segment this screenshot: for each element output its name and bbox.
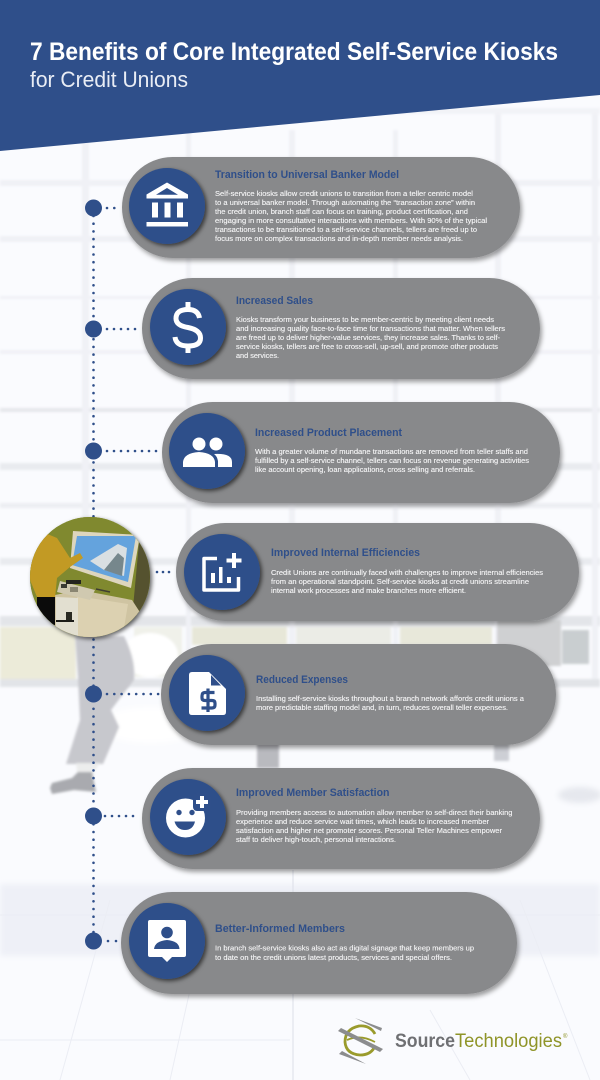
panel: Reduced Expenses	[161, 644, 556, 745]
logo: Source Technologies: Technologies	[455, 1031, 562, 1052]
body text: In branch self-service kiosks also act as digital signage that keep members up	[215, 944, 474, 952]
body text: fulfilled by a self-service channel, tellers can focus on revenue generating activities	[255, 456, 529, 465]
body text: satisfaction and higher net promoter scores. Personal Teller Machines empower	[236, 826, 502, 835]
body text: Kiosks transform your business to be member-centric by meeting client needs	[236, 315, 494, 324]
body text: Providing members access to automation allow member to self-direct their banking	[236, 808, 512, 817]
body text: With a greater volume of mundane transactions are removed from teller staffs and	[255, 447, 528, 456]
body text: from an operational standpoint. Self-service kiosks at credit unions streamline	[271, 577, 529, 586]
icon: document with dollar	[169, 655, 245, 731]
panel: Improved Internal Efficiencies	[176, 523, 579, 621]
header banner	[0, 0, 600, 151]
logo: Source Technologies: Source	[395, 1031, 455, 1052]
body text: staff to deliver high-touch, personal interactions.	[236, 835, 396, 844]
subtitle: for Credit Unions	[30, 67, 188, 92]
timeline	[85, 200, 175, 950]
icon: dollar sign	[150, 289, 226, 365]
body text: transactions to be transitioned to a self-service channels, tellers are freed up to	[215, 225, 477, 234]
body text: the credit union, branch staff can focus on training, product certification, and	[215, 207, 468, 216]
body text: engaging in more consultative interactions with members. With 90% of the typical	[215, 216, 487, 225]
logo: Source Technologies	[338, 1018, 568, 1064]
body text: Self-service kiosks allow credit unions to transition from a teller centric model	[215, 189, 473, 198]
body text	[236, 808, 512, 844]
body text	[236, 315, 505, 360]
body text: like account opening, loan applications, cross selling and referrals.	[255, 465, 475, 474]
body text: more predictable staffing model and, in turn, reduces overall teller expenses.	[256, 703, 508, 712]
heading: Transition to Universal Banker Model	[215, 169, 399, 181]
icon: smiley with plus	[150, 779, 226, 855]
panel: Transition to Universal Banker Model	[122, 157, 520, 258]
panel: Improved Member Satisfaction	[142, 768, 540, 869]
icon: member profile sign	[129, 903, 205, 979]
body text	[271, 568, 543, 595]
panel: Increased Sales	[142, 278, 540, 379]
body text: internal work processes and make branches more efficient.	[271, 586, 466, 595]
body text: to a universal banker model. Through automating the “transaction zone” within	[215, 198, 475, 207]
heading: Increased Sales	[236, 295, 313, 307]
heading: Increased Product Placement	[255, 427, 402, 439]
heading: Improved Member Satisfaction	[236, 787, 390, 799]
logo: Source Technologies: ®	[563, 1033, 568, 1040]
title: 7 Benefits of Core Integrated Self-Service Kiosks	[30, 38, 558, 66]
walking figure silhouette	[50, 636, 509, 794]
body text: are freed up to deliver higher-value services, they increase sales. Thanks to self-	[236, 333, 500, 342]
icon: chart with plus	[184, 534, 260, 610]
body text: focus more on complex transactions and in-depth member needs analysis.	[215, 234, 463, 243]
kiosk photo	[30, 517, 150, 640]
body text	[255, 447, 529, 474]
body text: Credit Unions are continually faced with challenges to improve internal efficiencies	[271, 568, 543, 577]
panel: Increased Product Placement	[162, 402, 560, 503]
body text: experience and reduce service wait times, which leads to increased member	[236, 817, 489, 826]
heading: Better-Informed Members	[215, 923, 345, 935]
body text: and increasing quality face-to-face time for transactions that matter. When tellers	[236, 324, 505, 333]
icon: bank	[129, 168, 205, 244]
body text	[215, 189, 487, 243]
panel: Better-Informed Members	[121, 892, 517, 994]
body text	[256, 694, 525, 712]
icon: people	[169, 413, 245, 489]
body text	[215, 944, 474, 962]
body text: service kiosks, tellers are free to cross-sell, up-sell, and promote other products	[236, 342, 498, 351]
body text: to date on the credit unions latest products, services and special offers.	[215, 953, 452, 962]
body text: Installing self-service kiosks throughout a branch network affords credit unions a	[256, 694, 525, 703]
heading: Reduced Expenses	[256, 674, 348, 686]
heading: Improved Internal Efficiencies	[271, 547, 420, 559]
body text: and services.	[236, 351, 279, 360]
